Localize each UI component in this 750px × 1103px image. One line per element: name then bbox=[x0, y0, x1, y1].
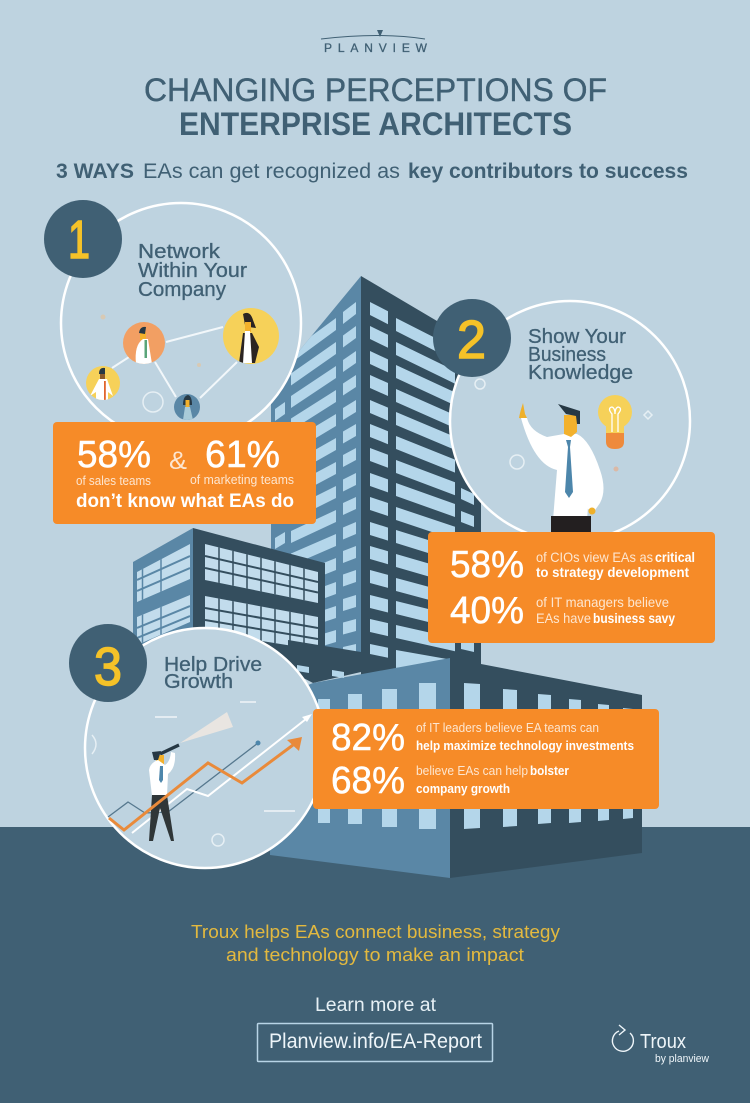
callout: CIO and IT manager stats: of IT managers believe bbox=[536, 594, 669, 610]
callout: IT leader stats: of IT leaders believe EA teams can bbox=[416, 721, 599, 735]
circle 2 bbox=[450, 301, 690, 541]
heading: Network Within Your Company bbox=[138, 241, 247, 301]
small building windows bbox=[137, 544, 318, 646]
subtitle: 3 WAYS bbox=[56, 160, 134, 183]
subtitle: EAs can get recognized as bbox=[143, 160, 400, 183]
number badge 3: 3 bbox=[94, 637, 122, 697]
heading: Show Your Business Knowledge: Knowledge bbox=[528, 362, 633, 384]
callout: IT leader stats: believe EAs can help bbox=[416, 764, 528, 778]
panel: step 3 drive growth bbox=[69, 624, 325, 868]
link button bbox=[258, 1024, 492, 1062]
decorations bbox=[92, 702, 295, 846]
tall tower bbox=[271, 276, 481, 690]
number badge 2 bbox=[433, 299, 511, 377]
callout: CIO and IT manager stats: to strategy development bbox=[536, 564, 689, 580]
person: big yellow node bbox=[239, 313, 259, 363]
panel: step 2 business knowledge bbox=[433, 299, 690, 541]
footer tagline bbox=[191, 921, 561, 965]
heading: Help Drive Growth bbox=[164, 654, 262, 693]
callout: CIO and IT manager stats: business savy bbox=[593, 610, 675, 626]
logo: Troux by Planview: Troux bbox=[640, 1031, 686, 1053]
heading: Show Your Business Knowledge bbox=[528, 326, 633, 384]
callout: sales and marketing stats: of sales teams bbox=[76, 474, 151, 488]
callout: sales and marketing stats: of marketing teams bbox=[190, 473, 294, 487]
chart: orange trend arrow bbox=[109, 737, 302, 830]
title bbox=[144, 72, 607, 142]
decorations bbox=[475, 379, 652, 469]
heading: Help Drive Growth: Help Drive bbox=[164, 654, 262, 676]
circle 3 bbox=[85, 628, 325, 868]
number badge 1 bbox=[44, 200, 122, 278]
panel: step 1 network bbox=[44, 200, 301, 443]
figure: presenter bbox=[519, 403, 618, 534]
heading: Network Within Your Company: Within Your bbox=[138, 260, 247, 282]
logo: Troux by Planview: by planview bbox=[655, 1053, 709, 1065]
low building bbox=[270, 640, 642, 878]
heading: Show Your Business Knowledge: Show Your bbox=[528, 326, 626, 348]
callout: IT leader stats bbox=[313, 709, 659, 809]
small building bbox=[130, 528, 325, 665]
callout: sales and marketing stats bbox=[53, 422, 316, 524]
learn more label: Learn more at bbox=[315, 995, 437, 1016]
chart: growth lines bbox=[108, 714, 312, 833]
callout: CIO and IT manager stats: 58% bbox=[450, 544, 524, 586]
figure: man with telescope bbox=[149, 712, 233, 841]
heading: Show Your Business Knowledge: Business bbox=[528, 344, 606, 366]
callout: IT leader stats: 68% bbox=[331, 760, 405, 802]
heading: Network Within Your Company: Company bbox=[138, 279, 226, 301]
callout: IT leader stats: company growth bbox=[416, 782, 510, 796]
network diagram bbox=[86, 308, 279, 420]
heading: Network Within Your Company: Network bbox=[138, 241, 221, 263]
icon: light bulb bbox=[598, 395, 632, 449]
person: orange node bbox=[136, 327, 152, 364]
low building windows bbox=[297, 665, 633, 829]
person: small yellow node bbox=[90, 368, 113, 400]
callout: CIO and IT manager stats: EAs have bbox=[536, 610, 591, 626]
callout: IT leader stats: 82% bbox=[331, 717, 405, 759]
callout: CIO and IT manager stats bbox=[428, 532, 715, 643]
ground band bbox=[0, 827, 750, 1103]
title: ENTERPRISE ARCHITECTS bbox=[179, 106, 572, 142]
callout: sales and marketing stats: 61% bbox=[205, 434, 280, 476]
number badge 1: 1 bbox=[68, 210, 90, 270]
circle 1 bbox=[61, 203, 301, 443]
ampersand: & bbox=[169, 447, 187, 475]
footer tagline: and technology to make an impact bbox=[226, 944, 524, 965]
footer tagline: Troux helps EAs connect business, strategy bbox=[191, 921, 561, 942]
subtitle bbox=[56, 160, 688, 183]
callout: CIO and IT manager stats: 40% bbox=[450, 590, 524, 632]
logo: Troux by Planview bbox=[612, 1025, 709, 1065]
callout: CIO and IT manager stats: critical bbox=[655, 549, 695, 565]
callout: IT leader stats: bolster bbox=[530, 764, 569, 778]
logo: Planview: PLANVIEW bbox=[324, 41, 428, 55]
callout: CIO and IT manager stats: of CIOs view EAs as bbox=[536, 549, 653, 565]
callout: sales and marketing stats: 58% bbox=[77, 434, 151, 476]
logo: Planview bbox=[321, 30, 428, 55]
link button: Planview.info/EA-Report bbox=[269, 1030, 482, 1053]
number badge 2: 2 bbox=[457, 310, 486, 370]
title: CHANGING PERCEPTIONS OF bbox=[144, 72, 607, 108]
callout: IT leader stats: help maximize technology investments bbox=[416, 739, 634, 753]
number badge 3 bbox=[69, 624, 147, 702]
person: blue node bbox=[183, 395, 193, 420]
subtitle: key contributors to success bbox=[408, 160, 688, 183]
heading: Help Drive Growth: Growth bbox=[164, 671, 233, 693]
callout: sales and marketing stats: don’t know what EAs do bbox=[76, 491, 294, 512]
